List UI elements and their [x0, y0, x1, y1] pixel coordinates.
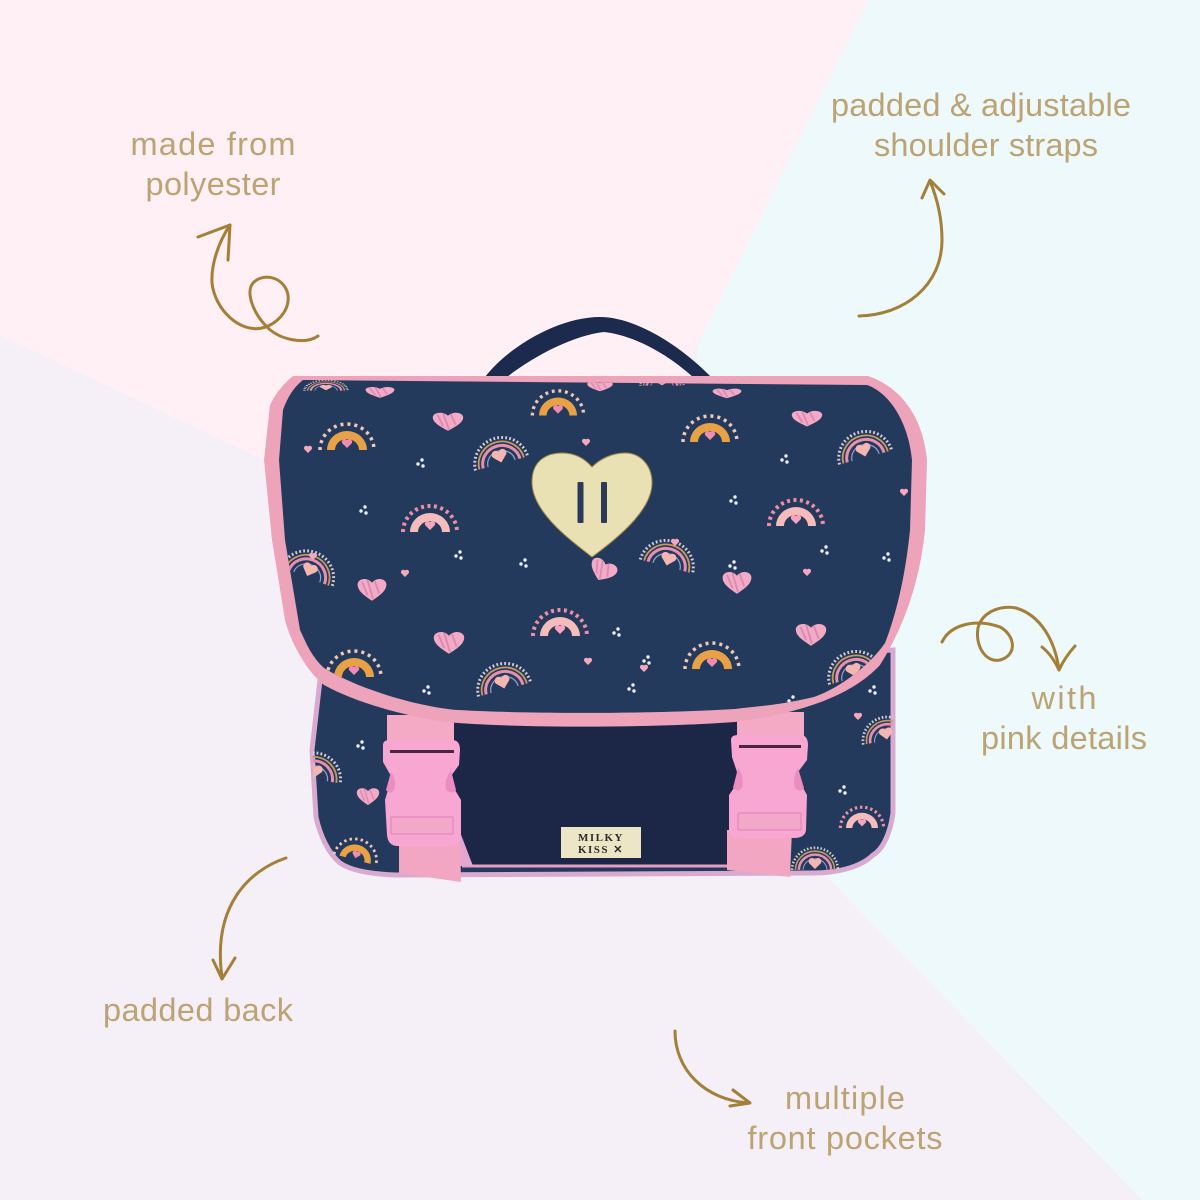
- handle: [485, 317, 711, 377]
- right buckle: [729, 735, 808, 838]
- left buckle: [383, 740, 461, 846]
- schoolbag illustration: [264, 317, 927, 882]
- flap pink binding: [264, 376, 927, 727]
- callout: made from polyester: [130, 126, 296, 202]
- callout: made from polyester: polyester: [146, 166, 281, 202]
- flap print pattern: [282, 373, 908, 705]
- right strap: [727, 712, 804, 877]
- bag body with print: [287, 650, 911, 875]
- arrow: front pockets: [675, 1031, 750, 1106]
- callout: padded and adjustable shoulder straps: shoulder straps: [874, 127, 1098, 163]
- callout: padded and adjustable shoulder straps: padded & adjustable: [831, 87, 1131, 123]
- callout: with pink details: pink details: [981, 720, 1147, 756]
- arrow: padded back: [213, 858, 286, 979]
- left strap: [387, 715, 473, 882]
- callout: with pink details: with: [1030, 680, 1096, 716]
- label: Milky Kiss: KISS ✕: [578, 844, 624, 856]
- callout: multiple front pockets: front pockets: [748, 1120, 942, 1156]
- callout: padded and adjustable shoulder straps: [831, 87, 1131, 163]
- callout: padded back: padded back: [103, 992, 294, 1028]
- arrow: polyester curl: [198, 225, 318, 341]
- flap: [264, 373, 927, 727]
- gold heart patch: [532, 453, 652, 557]
- arrow: shoulder straps: [859, 180, 944, 316]
- callout: with pink details: [981, 680, 1147, 756]
- panel bottom trim: [462, 864, 730, 868]
- label: Milky Kiss: [561, 827, 641, 858]
- callout: made from polyester: made from: [130, 126, 296, 162]
- front panel: [452, 715, 739, 865]
- background: aqua right panel: [640, 0, 1200, 1200]
- arrow: pink details curl: [942, 607, 1075, 670]
- background: pink upper-left panel: [0, 0, 868, 477]
- flap fabric: [279, 380, 912, 713]
- callout: multiple front pockets: [748, 1080, 942, 1156]
- callout: multiple front pockets: multiple: [785, 1080, 905, 1116]
- label: Milky Kiss: MILKY: [578, 832, 624, 844]
